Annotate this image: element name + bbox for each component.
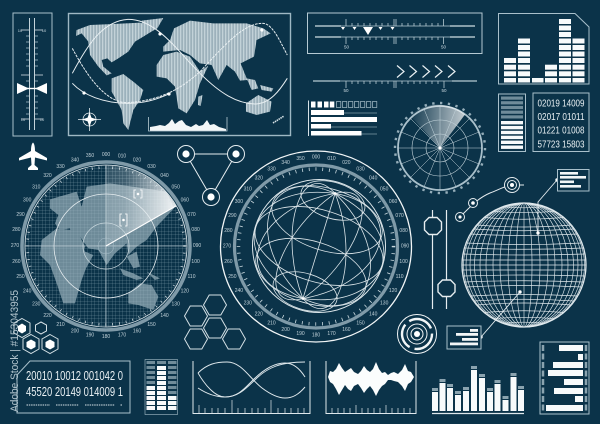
chart: audio waveform: [326, 361, 416, 414]
panel: vertical gauge: [13, 13, 52, 136]
diagram: central dial with globe: [220, 151, 412, 342]
radar: degree labels: 210: [56, 322, 65, 328]
panel: right horizontal bars: [540, 342, 589, 414]
radar: degree labels: 300: [23, 198, 32, 204]
dial: degree labels: 290: [228, 213, 237, 219]
dial: degree labels: 150: [356, 321, 365, 327]
radar: degree labels: 150: [147, 322, 156, 328]
radar: degree labels: 270: [11, 243, 19, 249]
dial: degree labels: 320: [255, 175, 263, 181]
callout: lower sphere label: [447, 290, 522, 349]
scale: lower ruler: 50: [343, 88, 349, 93]
dial: degree labels: 010: [327, 156, 336, 162]
panel: vertical gauge: 10: [18, 28, 23, 33]
dial: degree labels: 330: [267, 166, 276, 172]
dial: degree labels: 190: [296, 331, 305, 337]
radar: degree labels: 010: [118, 154, 126, 160]
dial: degree labels: [223, 154, 409, 338]
radar: degree labels: 110: [188, 274, 196, 280]
dial: degree labels: 350: [296, 156, 305, 162]
radar: degree labels: 290: [16, 212, 25, 218]
panel: number readout: 57723 15803: [538, 138, 585, 150]
radar: degree labels: 260: [12, 259, 21, 265]
dial: degree labels: 050: [380, 186, 389, 192]
radar: degree labels: 240: [23, 288, 32, 294]
radar: degree labels: 310: [32, 184, 41, 190]
dial: degree labels: 060: [389, 199, 397, 205]
dial: rings: [220, 151, 412, 342]
chart: horizontal bar list: [308, 100, 377, 136]
dial: degree labels: 180: [312, 332, 320, 338]
dial: degree labels: 100: [399, 259, 408, 265]
radar: grid: [25, 165, 187, 327]
radar: degree labels: 230: [32, 302, 41, 308]
map: orbit markers: [82, 28, 264, 96]
dial: degree labels: 260: [224, 259, 233, 265]
radar: degree labels: 160: [133, 328, 141, 334]
icon: airplane: [19, 142, 47, 170]
dial: degree labels: 280: [224, 228, 233, 234]
panel: vertical gauge: 10: [21, 117, 26, 122]
dial: degree labels: 120: [389, 288, 397, 294]
radar: degree labels: 120: [181, 288, 189, 294]
radar: degree labels: 320: [43, 173, 52, 179]
dial: degree labels: 130: [380, 301, 389, 307]
radar: degree labels: 000: [102, 152, 110, 158]
radar: degree labels: 040: [160, 173, 169, 179]
radar: degree labels: 080: [191, 227, 200, 233]
radar: degree labels: 220: [43, 313, 52, 319]
dial: degree labels: 040: [369, 175, 378, 181]
radar: degree labels: 130: [172, 302, 180, 308]
dial: degree labels: 080: [399, 228, 408, 234]
radar: rings: [22, 162, 190, 330]
dial: degree labels: 020: [342, 160, 351, 166]
radar: degree labels: [11, 152, 201, 340]
dial: degree labels: 070: [395, 213, 404, 219]
panel: top scale: 50: [441, 44, 446, 50]
radar: degree labels: 050: [172, 184, 180, 190]
panel: vertical gauge: 10: [40, 117, 45, 122]
dial: degree labels: 340: [281, 160, 290, 166]
panel: number readout: 02017 01011: [538, 111, 585, 123]
watermark: stock id: Adobe Stock | #153043955: [9, 290, 21, 412]
dial: degree labels: 000: [312, 154, 320, 160]
panel: top scale: [308, 13, 482, 54]
radar: degree labels: 200: [71, 328, 79, 334]
dial: degree labels: 230: [244, 301, 252, 307]
dial: degree labels: 200: [281, 327, 290, 333]
radar: degree labels: 170: [118, 333, 126, 339]
diagram: wireframe sphere: [462, 203, 586, 327]
radar: degree labels: 030: [147, 164, 156, 170]
chart: equalizer: [145, 360, 178, 414]
panel: number readout: 01221 01008: [538, 124, 585, 136]
chart: sine waves: [193, 361, 310, 414]
dial: degree labels: 250: [228, 274, 237, 280]
radar: degree labels: 190: [86, 333, 94, 339]
scale: lower ruler: 50: [441, 88, 447, 93]
panel: vertical gauge: 10: [42, 28, 47, 33]
dial: degree labels: 160: [342, 327, 351, 333]
icon: compass: [78, 108, 101, 131]
diagram: triangle network: [178, 146, 244, 206]
map: orbit curves: [72, 19, 287, 104]
dial: degree labels: 270: [223, 244, 231, 250]
scale: lower ruler: [313, 81, 477, 93]
dial: degree labels: 140: [369, 312, 378, 318]
icon: target reticle: [398, 314, 436, 354]
panel: number readout: [533, 93, 589, 152]
map: small dash marker: [273, 116, 284, 123]
dial: degree labels: 310: [244, 186, 252, 192]
control: sliders: [424, 210, 455, 309]
radar: degree labels: 180: [102, 334, 110, 340]
radar: sweep: [106, 165, 176, 246]
panel: level meter: [498, 94, 526, 152]
radar: degree labels: 070: [187, 212, 196, 218]
radar: land mass: [40, 183, 174, 310]
map: continents: [76, 18, 273, 130]
radar: degree labels: 330: [56, 164, 65, 170]
radar: degree labels: 090: [193, 243, 201, 249]
icons: outline hexagons: [184, 295, 246, 349]
dial: degree labels: 240: [235, 288, 243, 294]
chart: main radar: [11, 152, 201, 340]
dial: degree labels: 300: [235, 199, 243, 205]
panel: number data: [17, 361, 130, 413]
dial: wireframe globe: [236, 163, 402, 329]
radar: degree labels: 100: [191, 259, 200, 265]
dial: degree labels: 220: [255, 312, 263, 318]
dial: degree labels: 090: [401, 244, 409, 250]
radar: degree labels: 280: [12, 227, 21, 233]
chart: mountain area: [148, 117, 227, 131]
radar: degree labels: 340: [71, 158, 79, 164]
callout: upper sphere label: [536, 170, 589, 235]
chart: small radar: [395, 103, 485, 193]
arrows: chevrons: [397, 66, 455, 78]
radar: degree labels: 250: [16, 274, 25, 280]
dial: degree labels: 210: [267, 321, 276, 327]
radar: targets: [120, 190, 142, 226]
dial: degree labels: 030: [356, 166, 365, 172]
chart: capped bar chart: [432, 366, 524, 414]
radar: degree labels: 350: [86, 153, 94, 159]
radar: degree labels: 020: [133, 158, 141, 164]
icon: node arc: [456, 178, 524, 222]
radar: degree labels: 060: [181, 198, 189, 204]
icons: filled hexagons: [14, 318, 58, 354]
dial: degree labels: 110: [396, 274, 404, 280]
panel: world map: [68, 14, 290, 136]
panel: segmented bar chart: [498, 14, 589, 84]
dial: degree labels: 170: [327, 331, 336, 337]
panel: number data: 20010 10012 001042 0: [26, 368, 123, 383]
panel: number readout: 02019 14009: [538, 98, 585, 110]
panel: number data: 45520 20149 014009 1: [26, 384, 123, 399]
radar: degree labels: 140: [160, 313, 169, 319]
panel: top scale: 50: [344, 44, 349, 50]
